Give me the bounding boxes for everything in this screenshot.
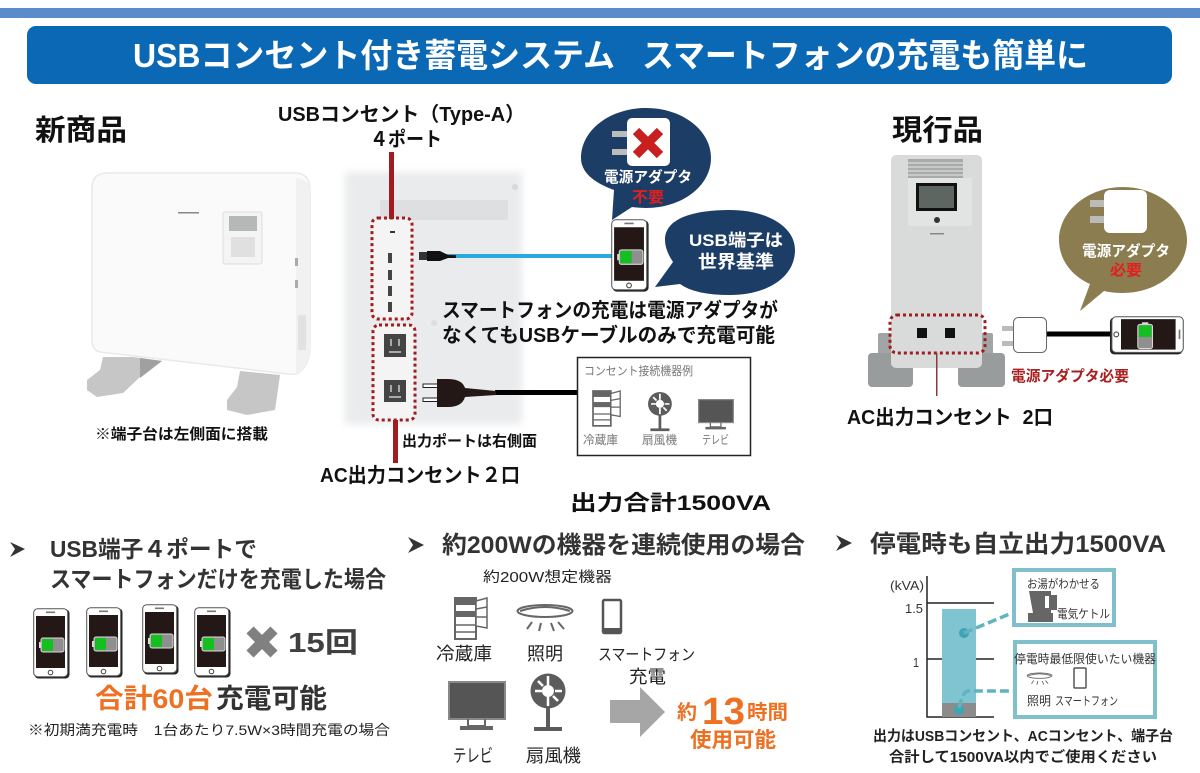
speech bubble: adapter not needed	[581, 108, 711, 220]
device: fridge: 冷蔵庫	[436, 644, 492, 664]
heading: USB端子４ポートで	[50, 536, 257, 562]
label: AC outlets: AC出力コンセント２口	[320, 464, 520, 487]
heading: 停電時も自立出力1500VA	[870, 531, 1166, 558]
device: smartphone	[598, 600, 695, 687]
device: light: 照明	[527, 644, 563, 664]
speech bubble: USB world standard: USB端子は	[689, 231, 783, 250]
result: 13 hours: 使用可能	[690, 729, 776, 752]
result: 60 phones: 充電可能	[216, 684, 327, 714]
chart: output bar: 1	[913, 655, 919, 670]
result: 13 hours: 約	[677, 701, 697, 724]
note: output limit: 合計して1500VA以内でご使用ください	[889, 748, 1157, 766]
subheading: 約200W想定機器	[483, 569, 613, 586]
panel: connected device examples: 冷蔵庫	[583, 433, 618, 447]
note: output limit	[873, 727, 1173, 766]
chart: output bar: 1.5	[905, 601, 923, 616]
label: USB outlet: USBコンセント（Type-A）	[278, 103, 525, 126]
callout: kettle	[1014, 570, 1114, 625]
speech bubble: adapter not needed: 電源アダプタ	[604, 168, 692, 186]
multiply 15 times	[250, 627, 358, 658]
result: 13 hours: 時間	[747, 701, 788, 724]
speech bubble: adapter needed: 必要	[1110, 261, 1142, 279]
title banner	[27, 26, 1172, 84]
heading: new product: 新商品	[35, 114, 127, 147]
result: 13 hours	[677, 691, 788, 752]
caption: USB charging: スマートフォンの充電は電源アダプタが	[442, 298, 778, 322]
label: USB outlet	[278, 103, 525, 151]
device: light	[518, 605, 572, 664]
callout: kettle: お湯がわかせる	[1027, 576, 1100, 591]
device: TV: テレビ	[453, 746, 493, 766]
callout: minimum devices: 停電時最低限使いたい機器	[1014, 651, 1156, 666]
footnote: ※初期満充電時 1台あたり7.5W×3時間充電の場合	[28, 722, 390, 738]
leader line: USB outlet	[389, 152, 394, 219]
heading: current product: 現行品	[892, 114, 983, 147]
label: AC outlets: AC出力コンセント 2口	[847, 406, 1053, 429]
speech bubble: adapter needed	[1059, 187, 1187, 311]
device: fan	[526, 674, 581, 766]
dotted highlight: AC outlets	[373, 325, 415, 420]
leader line	[936, 353, 938, 396]
note: terminal block side: ※端子台は左側面に搭載	[95, 425, 268, 443]
title banner: スマートフォンの充電も簡単に	[642, 37, 1088, 74]
speech bubble: USB world standard	[655, 210, 795, 295]
callout: minimum devices: スマートフォン	[1055, 694, 1118, 708]
speech bubble: adapter not needed: 不要	[632, 189, 664, 206]
leader line: AC outlet	[393, 420, 398, 463]
panel: connected device examples	[578, 358, 750, 456]
result: 13 hours: 13	[702, 691, 745, 733]
label: port location: 出力ポートは右側面	[402, 433, 537, 450]
bullet arrow	[10, 542, 25, 557]
heading: 約200Wの機器を連続使用の場合	[442, 532, 805, 559]
adapter and cord	[1002, 318, 1111, 352]
multiply 15 times: 15回	[288, 627, 358, 658]
speech bubble: USB world standard: 世界基準	[698, 251, 774, 272]
bullet arrow	[408, 537, 424, 553]
panel: connected device examples: 扇風機	[642, 433, 677, 447]
chart: output bar	[890, 576, 1020, 717]
callout: kettle: 電気ケトル	[1057, 606, 1110, 621]
panel: connected device examples: テレビ	[702, 433, 729, 447]
phone with USB charge	[612, 220, 649, 292]
panel: USB 4 ports	[10, 536, 390, 738]
caption: USB charging	[442, 298, 778, 347]
speech bubble: adapter needed: 電源アダプタ	[1082, 242, 1170, 260]
note: output limit: 出力はUSBコンセント、ACコンセント、端子台	[873, 727, 1173, 745]
callout: minimum devices	[1014, 642, 1156, 717]
chart: output bar: (kVA)	[890, 578, 924, 593]
device: smartphone: スマートフォン	[598, 647, 695, 664]
result: 60 phones	[95, 684, 327, 714]
result: 60 phones: 合計60台	[95, 684, 213, 714]
photo: new storage unit	[87, 173, 310, 415]
panel: 1500VA during outage	[836, 531, 1173, 766]
device: fridge	[436, 598, 492, 664]
heading: スマートフォンだけを充電した場合	[50, 566, 386, 592]
photo: current storage unit	[868, 155, 1005, 387]
USB cable	[419, 251, 612, 261]
panel: connected device examples: コンセント接続機器例	[584, 363, 693, 378]
dotted highlight: AC outlets	[890, 315, 985, 353]
photo: side panel with ports	[345, 172, 522, 424]
title banner: USBコンセント付き蓄電システム	[133, 37, 615, 74]
device: TV	[449, 682, 505, 766]
device: smartphone: 充電	[629, 667, 666, 687]
arrow	[610, 687, 665, 737]
four phones	[34, 605, 231, 678]
phone: landscape	[1110, 317, 1183, 354]
panel: 200W continuous use	[408, 532, 805, 766]
AC plug and cord	[423, 379, 578, 407]
label: adapter required: 電源アダプタ必要	[1011, 367, 1129, 385]
heading	[50, 536, 386, 592]
label: USB outlet: ４ポート	[370, 128, 442, 151]
bullet arrow	[836, 535, 852, 551]
callout: minimum devices: 照明	[1027, 694, 1051, 708]
label: output total: 出力合計1500VA	[570, 492, 771, 515]
dotted highlight: USB ports	[372, 218, 412, 319]
caption: USB charging: なくてもUSBケーブルのみで充電可能	[442, 323, 775, 347]
device: fan: 扇風機	[526, 746, 581, 766]
top stripe	[0, 8, 1200, 18]
